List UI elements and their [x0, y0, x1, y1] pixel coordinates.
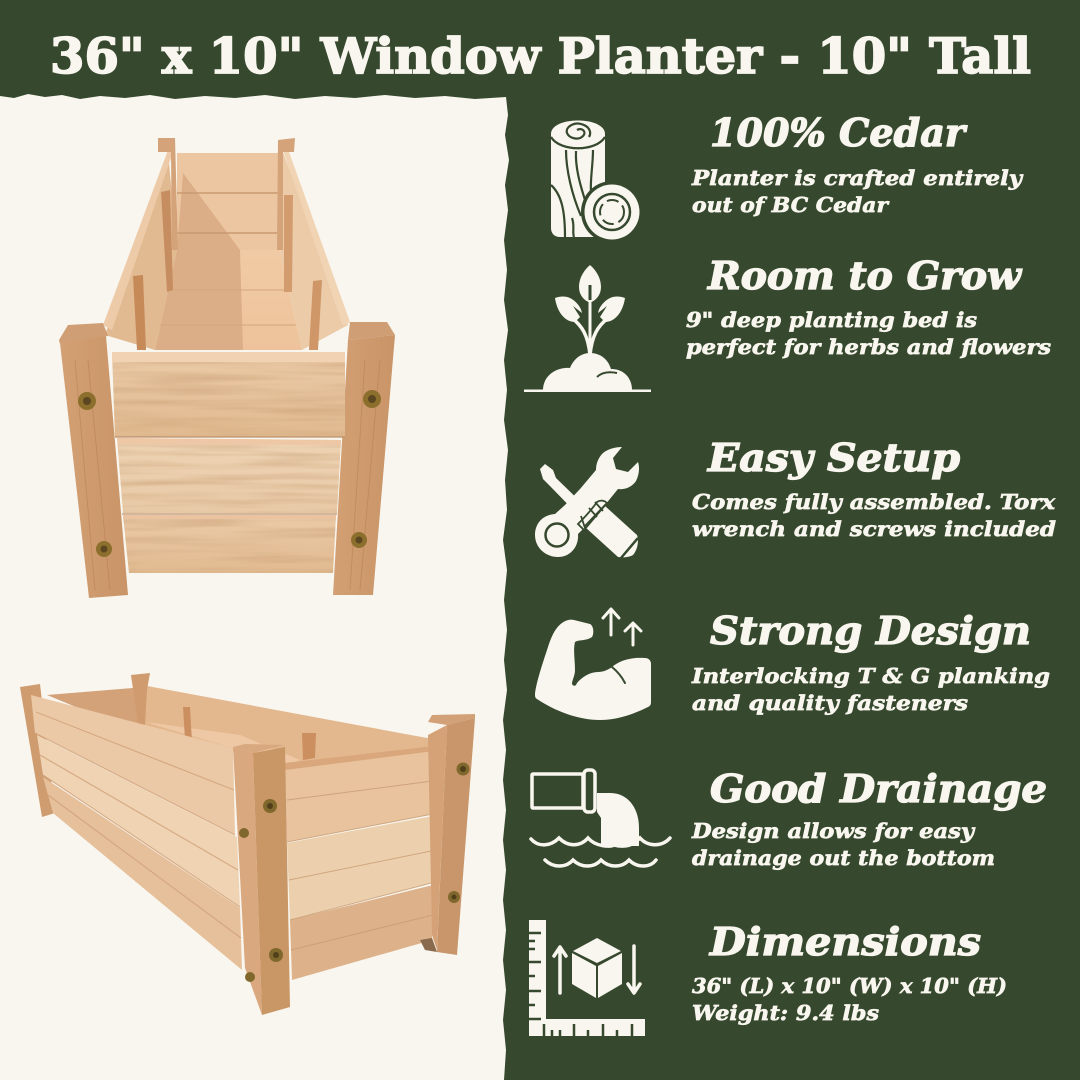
heading: Good Drainage: Good Drainage — [710, 766, 1047, 811]
text: drainage description: drainage out the bottom — [692, 846, 995, 870]
text: strong design description — [691, 664, 1050, 715]
text: drainage description — [691, 819, 995, 870]
photo: planter angled view — [20, 673, 475, 1015]
title: 36" x 10" Window Planter - 10" Tall — [50, 27, 1031, 85]
icon: flexed arm with arrows — [535, 609, 651, 720]
text: dimensions and weight: Weight: 9.4 lbs — [692, 1001, 879, 1025]
text: easy setup description — [692, 490, 1056, 541]
text: cedar description: out of BC Cedar — [692, 193, 890, 217]
icon: sprouting plant — [524, 265, 651, 392]
icon: ruler, cube and arrows — [529, 920, 645, 1036]
icon: drainage pipe and water — [531, 770, 670, 866]
text: cedar description — [691, 166, 1024, 217]
heading: Dimensions: Dimensions — [709, 919, 981, 964]
heading: 100% Cedar: 100% Cedar — [710, 110, 968, 155]
text: strong design description: Interlocking T & G planking — [691, 664, 1050, 688]
photo: planter end view — [59, 138, 395, 598]
text: dimensions and weight: 36" (L) x 10" (W) x 10" (H) — [692, 974, 1007, 998]
text: strong design description: and quality fasteners — [692, 691, 969, 715]
text: room to grow description — [686, 308, 1051, 359]
panel: torn cream photo area — [0, 94, 509, 1080]
text: room to grow description: 9" deep planting bed is — [686, 308, 977, 332]
heading: Easy Setup: Easy Setup — [707, 435, 960, 480]
heading: Strong Design: Strong Design — [710, 608, 1031, 653]
icon: crossed wrench and screwdriver — [535, 447, 639, 558]
heading: Room to Grow: Room to Grow — [707, 253, 1022, 298]
text: easy setup description: Comes fully assembled. Torx — [692, 490, 1056, 514]
text: cedar description: Planter is crafted entirely — [691, 166, 1024, 190]
icon: cedar logs — [551, 120, 643, 243]
text: drainage description: Design allows for easy — [691, 819, 976, 843]
text: dimensions and weight — [692, 974, 1007, 1025]
text: room to grow description: perfect for herbs and flowers — [686, 335, 1051, 359]
text: easy setup description: wrench and screws included — [692, 517, 1056, 541]
